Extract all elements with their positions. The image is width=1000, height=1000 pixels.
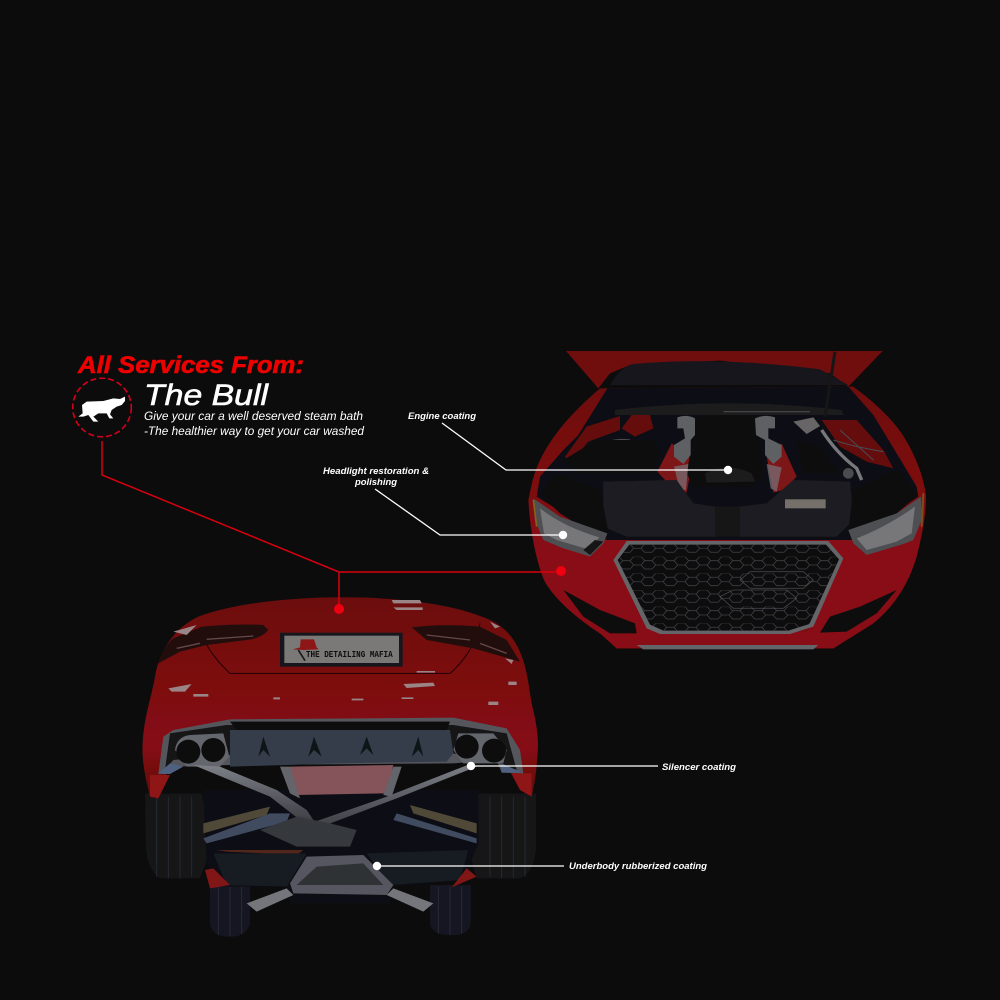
red connector lines: [102, 441, 560, 606]
callout: underbody coating: Underbody rubberized coating: [569, 861, 707, 871]
license plate: [280, 633, 403, 667]
highlights: [168, 600, 517, 705]
wiring and pipes: [822, 430, 862, 480]
right headlight: [848, 493, 923, 555]
left headlight: [533, 498, 607, 557]
underbody dark: [203, 790, 478, 903]
callout: engine coating: [408, 411, 732, 474]
fog vents: [563, 590, 897, 633]
lower lip: [637, 645, 818, 649]
callout: silencer coating: Silencer coating: [662, 762, 736, 772]
photo: rear of car underside: [142, 597, 538, 937]
heat shield: [290, 765, 393, 795]
rear body: [142, 597, 538, 798]
grille frame: [613, 541, 843, 634]
heading: all services from: All Services From:: [77, 352, 304, 379]
heading: the bull: The Bull: [144, 379, 269, 412]
diffuser: [158, 718, 523, 774]
throttle parts: [674, 416, 782, 464]
red dots: [334, 566, 566, 614]
body shell: [528, 387, 926, 648]
rear diff: [290, 855, 393, 895]
callout: headlight restoration: Headlight restoration &: [323, 466, 429, 476]
tail lights: [158, 624, 268, 663]
license plate: THE DETAILING MAFIA: [306, 650, 393, 660]
suspension arms: [203, 813, 477, 843]
engine bay: [537, 387, 918, 540]
grille mesh: [618, 545, 839, 631]
description text: -The healthier way to get your car washed: [144, 424, 365, 438]
photo: front of car with open hood: [528, 351, 926, 649]
callout: headlight restoration: [323, 466, 567, 539]
plastic shrouds: [603, 480, 853, 537]
trunk line: [202, 623, 480, 673]
callout: headlight restoration: polishing: [354, 477, 397, 487]
description text: Give your car a well deserved steam bath: [144, 409, 363, 423]
hood underside: [566, 351, 883, 388]
callout: underbody coating: [373, 861, 707, 871]
X pipes: [193, 765, 313, 820]
undertray: [213, 850, 468, 887]
bumper: [537, 540, 917, 648]
callout: silencer coating: [467, 762, 736, 772]
exhaust tips: [175, 733, 507, 767]
tyres: [145, 793, 536, 878]
description text: [144, 409, 365, 438]
engine cover: [687, 415, 763, 487]
icon: bull in dashed circle: [73, 378, 131, 437]
callout: engine coating: Engine coating: [408, 411, 476, 421]
